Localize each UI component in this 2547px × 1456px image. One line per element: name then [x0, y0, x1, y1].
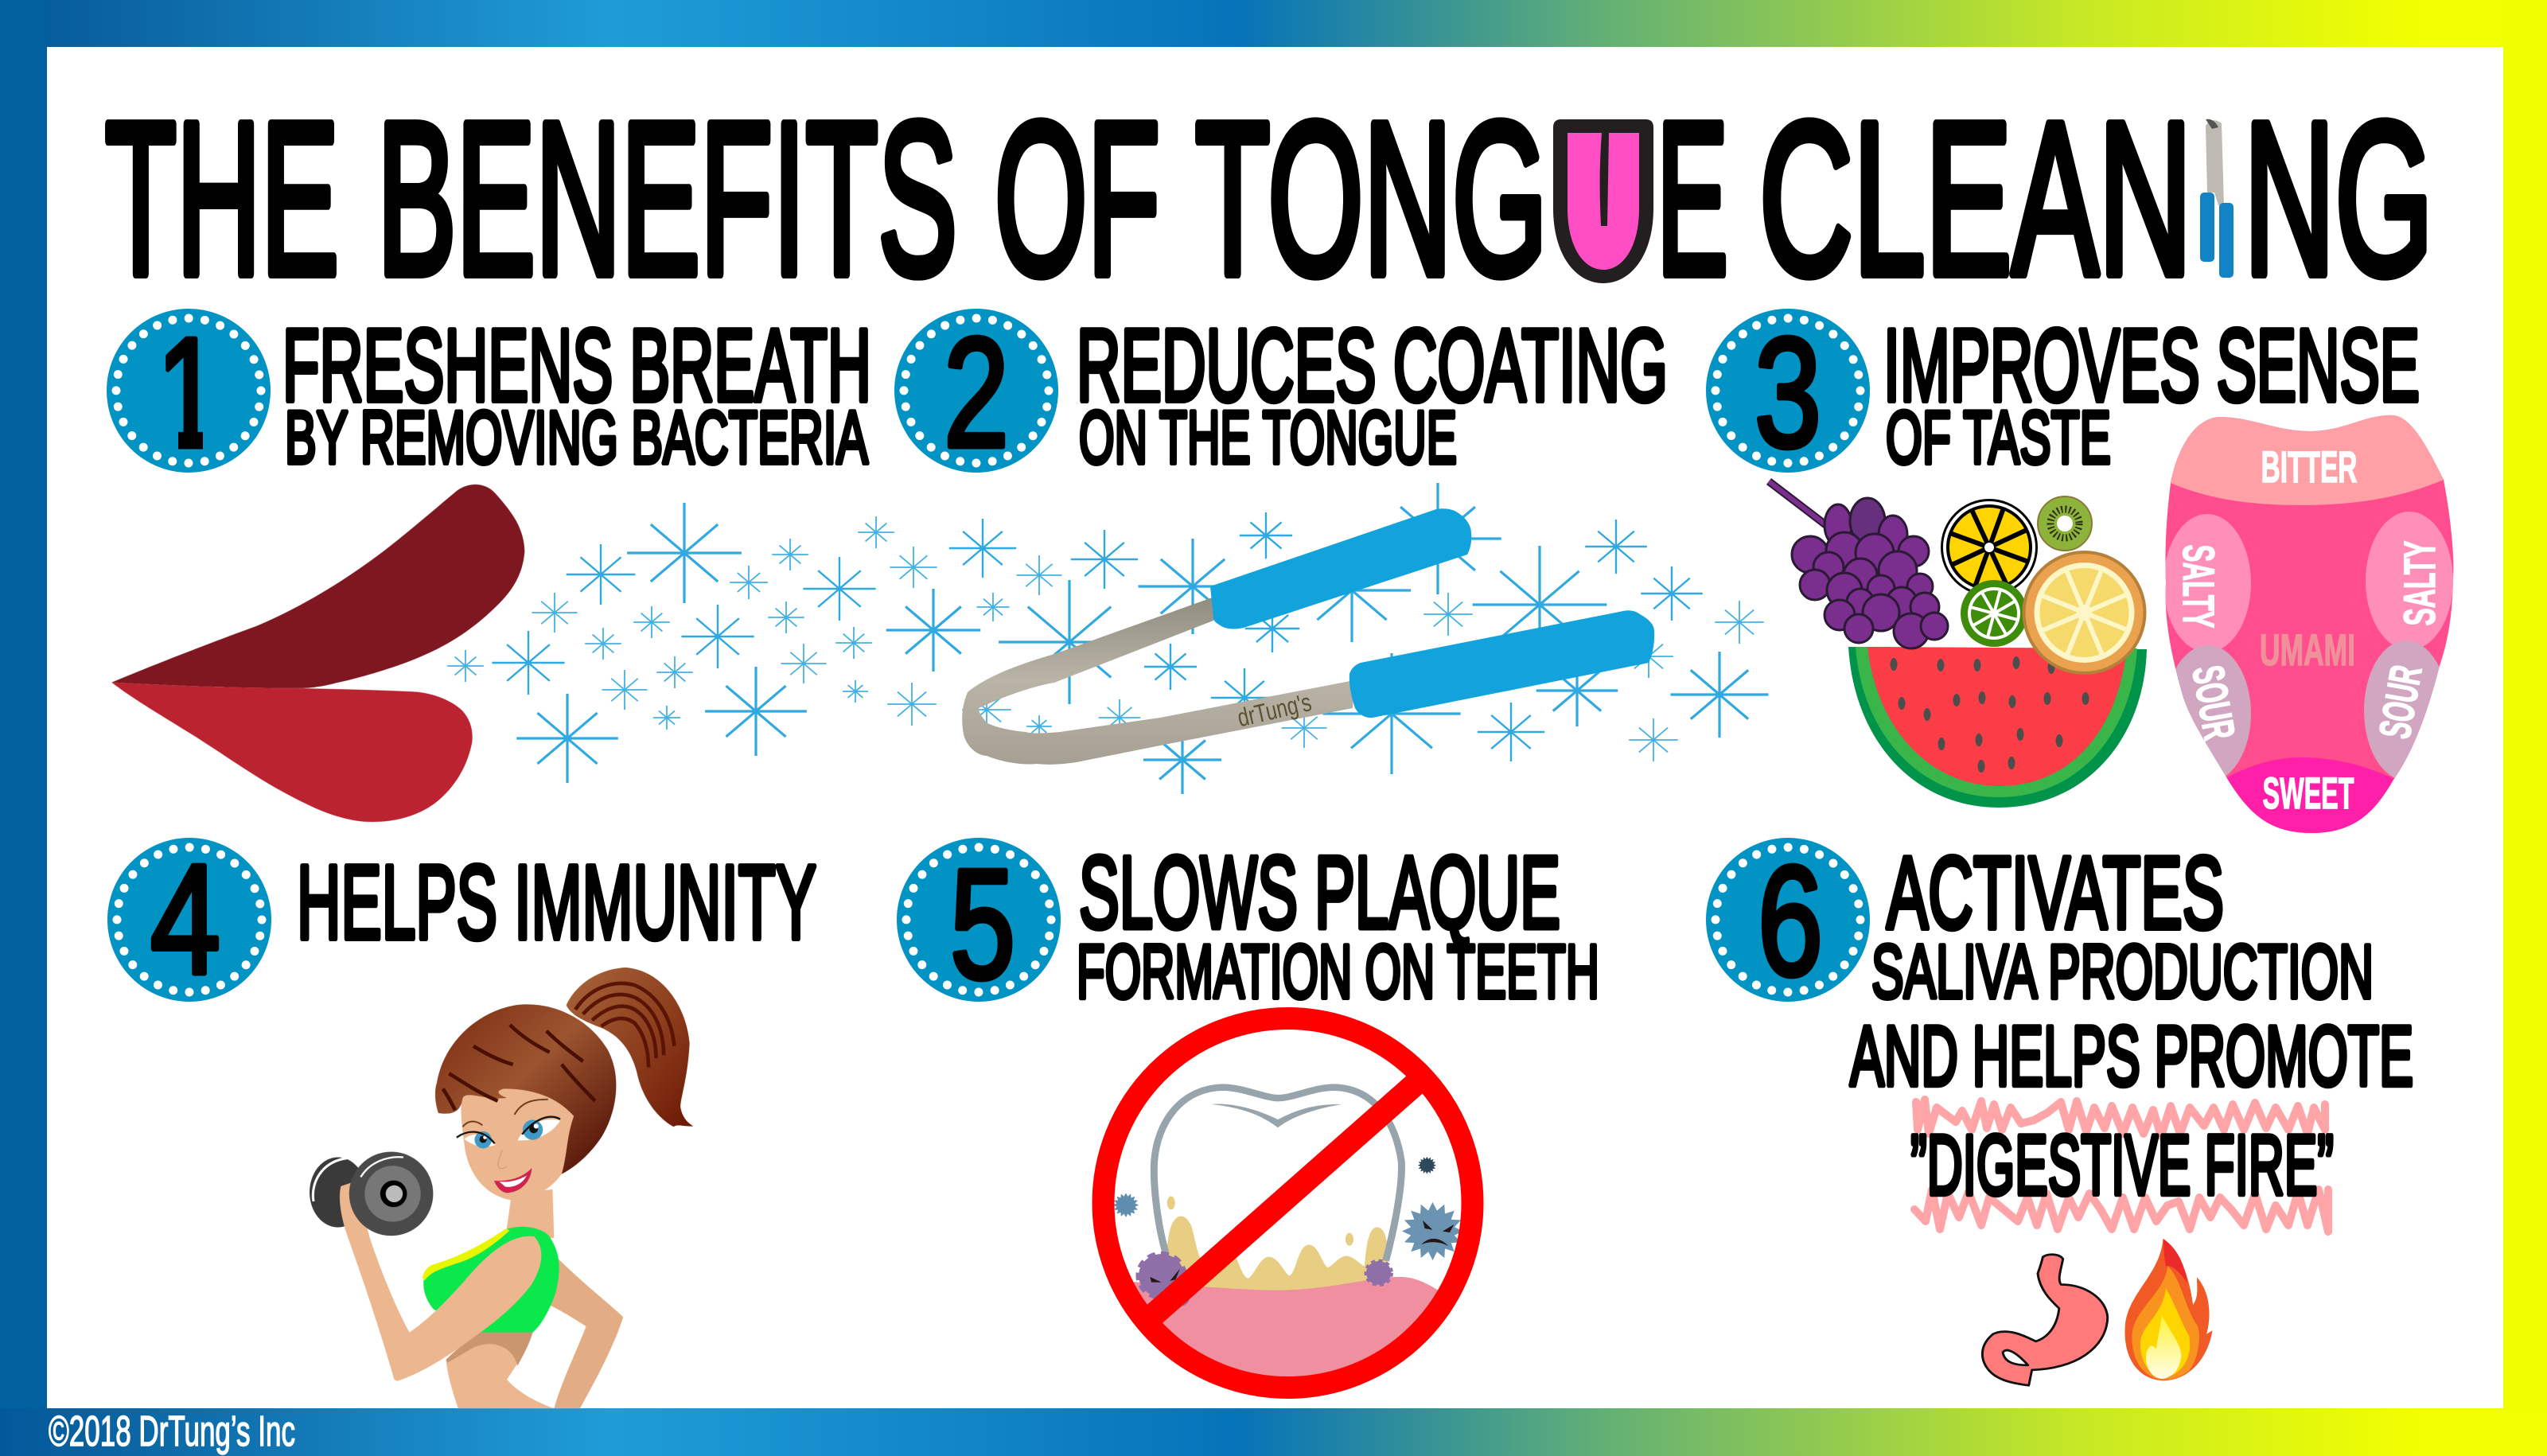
dumbbell front plate [313, 1152, 433, 1236]
watermelon [1848, 647, 2147, 808]
icon: tongue scraper: drTung's [1235, 687, 1314, 732]
taste labels: SOUR [2369, 661, 2432, 742]
germs [1113, 1157, 1463, 1306]
lime slice [1961, 580, 2027, 647]
heading 3: OF TASTE [1886, 395, 2111, 479]
icon: tooth with plaque in prohibition sign [1095, 1018, 1478, 1425]
raised arm [340, 1182, 541, 1381]
taste labels: SOUR [2183, 662, 2245, 743]
heading 1 [282, 309, 871, 479]
badge 6: 6 [1758, 834, 1823, 1008]
heading 2: REDUCES COATING [1077, 309, 1668, 423]
heading 3 [1883, 309, 2420, 479]
taste labels [2174, 442, 2444, 818]
face [457, 1084, 589, 1200]
badge 5: 5 [950, 837, 1015, 1011]
taste labels: SALTY [2174, 544, 2224, 629]
sparkles of fresh breath [447, 483, 1769, 794]
title: TONG [1195, 77, 1548, 320]
squiggle highlight [1914, 1100, 2328, 1232]
heading 5: FORMATION ON TEETH [1077, 929, 1599, 1014]
icon: tongue letter U: U [1623, 248, 1629, 257]
heading 1: FRESHENS BREATH [282, 309, 871, 423]
badge 2: 2 [944, 306, 1009, 480]
heading 2 [1077, 309, 1668, 479]
icon: stomach [1982, 1255, 2108, 1385]
icon: tongue scraper [962, 508, 1654, 765]
gum [1133, 1276, 1438, 1376]
lemon slice [1936, 494, 2043, 601]
panel 4: helps immunity [107, 832, 816, 1408]
orange slice [2023, 551, 2147, 675]
badge 4 [107, 832, 271, 1006]
taste labels: BITTER [2261, 442, 2357, 492]
heading 6: ACTIVATES [1887, 835, 2224, 950]
icon: tongue letter U [1553, 119, 1653, 283]
badge 6 [1706, 834, 1870, 1008]
grapes [1769, 481, 1948, 648]
title: BENEFITS [377, 77, 957, 320]
icon: lips [111, 485, 524, 822]
title: E [1657, 77, 1728, 320]
badge 2 [894, 306, 1058, 480]
title: THE [105, 77, 339, 320]
panel 1: freshens breath [107, 306, 871, 822]
plaque [1166, 1217, 1388, 1293]
taste labels: SWEET [2263, 768, 2354, 818]
copyright: ©2018 DrTung’s Inc [49, 1407, 295, 1455]
badge 3: 3 [1754, 306, 1821, 480]
heading 6 [1850, 835, 2413, 1104]
icon: tongue scraper letter I [2200, 119, 2233, 278]
heading 1: BY REMOVING BACTERIA [285, 395, 868, 479]
panel 3: improves sense of taste [1706, 306, 2467, 843]
neck [505, 1189, 554, 1238]
badge 1 [107, 306, 271, 480]
kiwi slice [2038, 496, 2092, 551]
icon: fruit [1769, 481, 2147, 808]
heading 2: ON THE TONGUE [1079, 395, 1457, 479]
panel 2: reduces coating [894, 306, 1668, 765]
badge 3 [1706, 306, 1870, 480]
sports top [423, 1227, 559, 1333]
title: OF [995, 77, 1160, 320]
hair [435, 1004, 616, 1174]
title: CLEAN [1759, 77, 2192, 320]
badge 4: 4 [150, 832, 220, 1006]
icon: tongue scraper letter I: I [2210, 153, 2213, 162]
icon: tongue taste map [2165, 415, 2454, 833]
tooth outline [1154, 1088, 1401, 1261]
badge 1: 1 [157, 306, 220, 480]
dumbbell rear plate [310, 1157, 366, 1228]
panel 5: slows plaque [897, 835, 1599, 1425]
icon: woman lifting dumbbell [310, 967, 693, 1408]
taste labels: UMAMI [2260, 625, 2355, 675]
heading 5: SLOWS PLAQUE [1079, 835, 1560, 950]
hip arm and torso [446, 1255, 623, 1408]
title [105, 77, 2433, 320]
badge 5 [897, 837, 1061, 1011]
panel 6: activates saliva [1706, 834, 2413, 1385]
heading 5 [1077, 835, 1599, 1014]
icon: flame [2124, 1239, 2212, 1380]
heading 4: HELPS IMMUNITY [297, 843, 816, 961]
ponytail [567, 967, 693, 1127]
taste labels: SALTY [2394, 541, 2444, 625]
